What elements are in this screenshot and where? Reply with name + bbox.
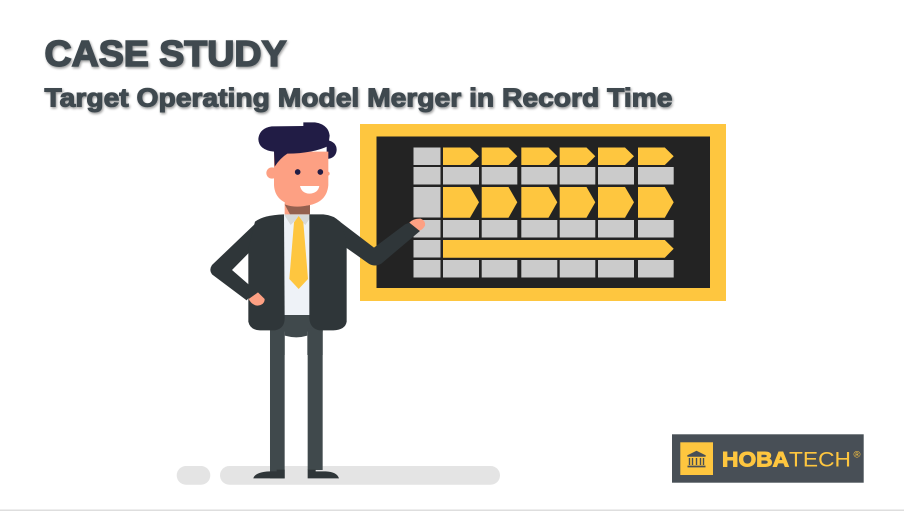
floor shadows bbox=[177, 466, 500, 485]
smile bbox=[300, 186, 319, 194]
row 3 large chevrons bbox=[443, 187, 674, 218]
logo wordmark: HOBATECH bbox=[722, 448, 851, 471]
row 6 cells bbox=[443, 260, 674, 278]
title: CASE STUDY bbox=[44, 33, 286, 74]
neck bbox=[285, 202, 310, 215]
logo: Hobatech bbox=[672, 434, 864, 483]
jacket left panel bbox=[248, 214, 285, 330]
row 5 long arrow bbox=[443, 240, 674, 258]
registered mark: ® bbox=[854, 450, 860, 460]
right arm pointing bbox=[333, 217, 420, 265]
trousers top bbox=[270, 312, 323, 337]
jacket right panel bbox=[309, 214, 347, 330]
illustration: presenter bbox=[210, 122, 425, 478]
back hair bump bbox=[327, 140, 337, 159]
shirt bbox=[284, 215, 311, 315]
head bbox=[274, 152, 328, 206]
panel: process board bbox=[360, 124, 726, 301]
eyes bbox=[295, 169, 300, 175]
legs and shoes bbox=[253, 327, 339, 478]
row 2 cells bbox=[443, 167, 674, 184]
row 1 chevrons bbox=[443, 148, 674, 165]
ear bbox=[266, 167, 278, 179]
row 4 cells bbox=[443, 220, 674, 238]
left header column cells bbox=[414, 148, 440, 278]
icon: bank building bbox=[688, 452, 706, 466]
logo icon square bbox=[680, 442, 713, 475]
tie bbox=[289, 216, 308, 289]
hair bbox=[258, 122, 330, 167]
left hand bbox=[249, 292, 265, 306]
collar bbox=[284, 214, 313, 225]
subtitle: Target Operating Model Merger in Record Time bbox=[44, 82, 672, 112]
left arm on hip bbox=[210, 222, 257, 300]
